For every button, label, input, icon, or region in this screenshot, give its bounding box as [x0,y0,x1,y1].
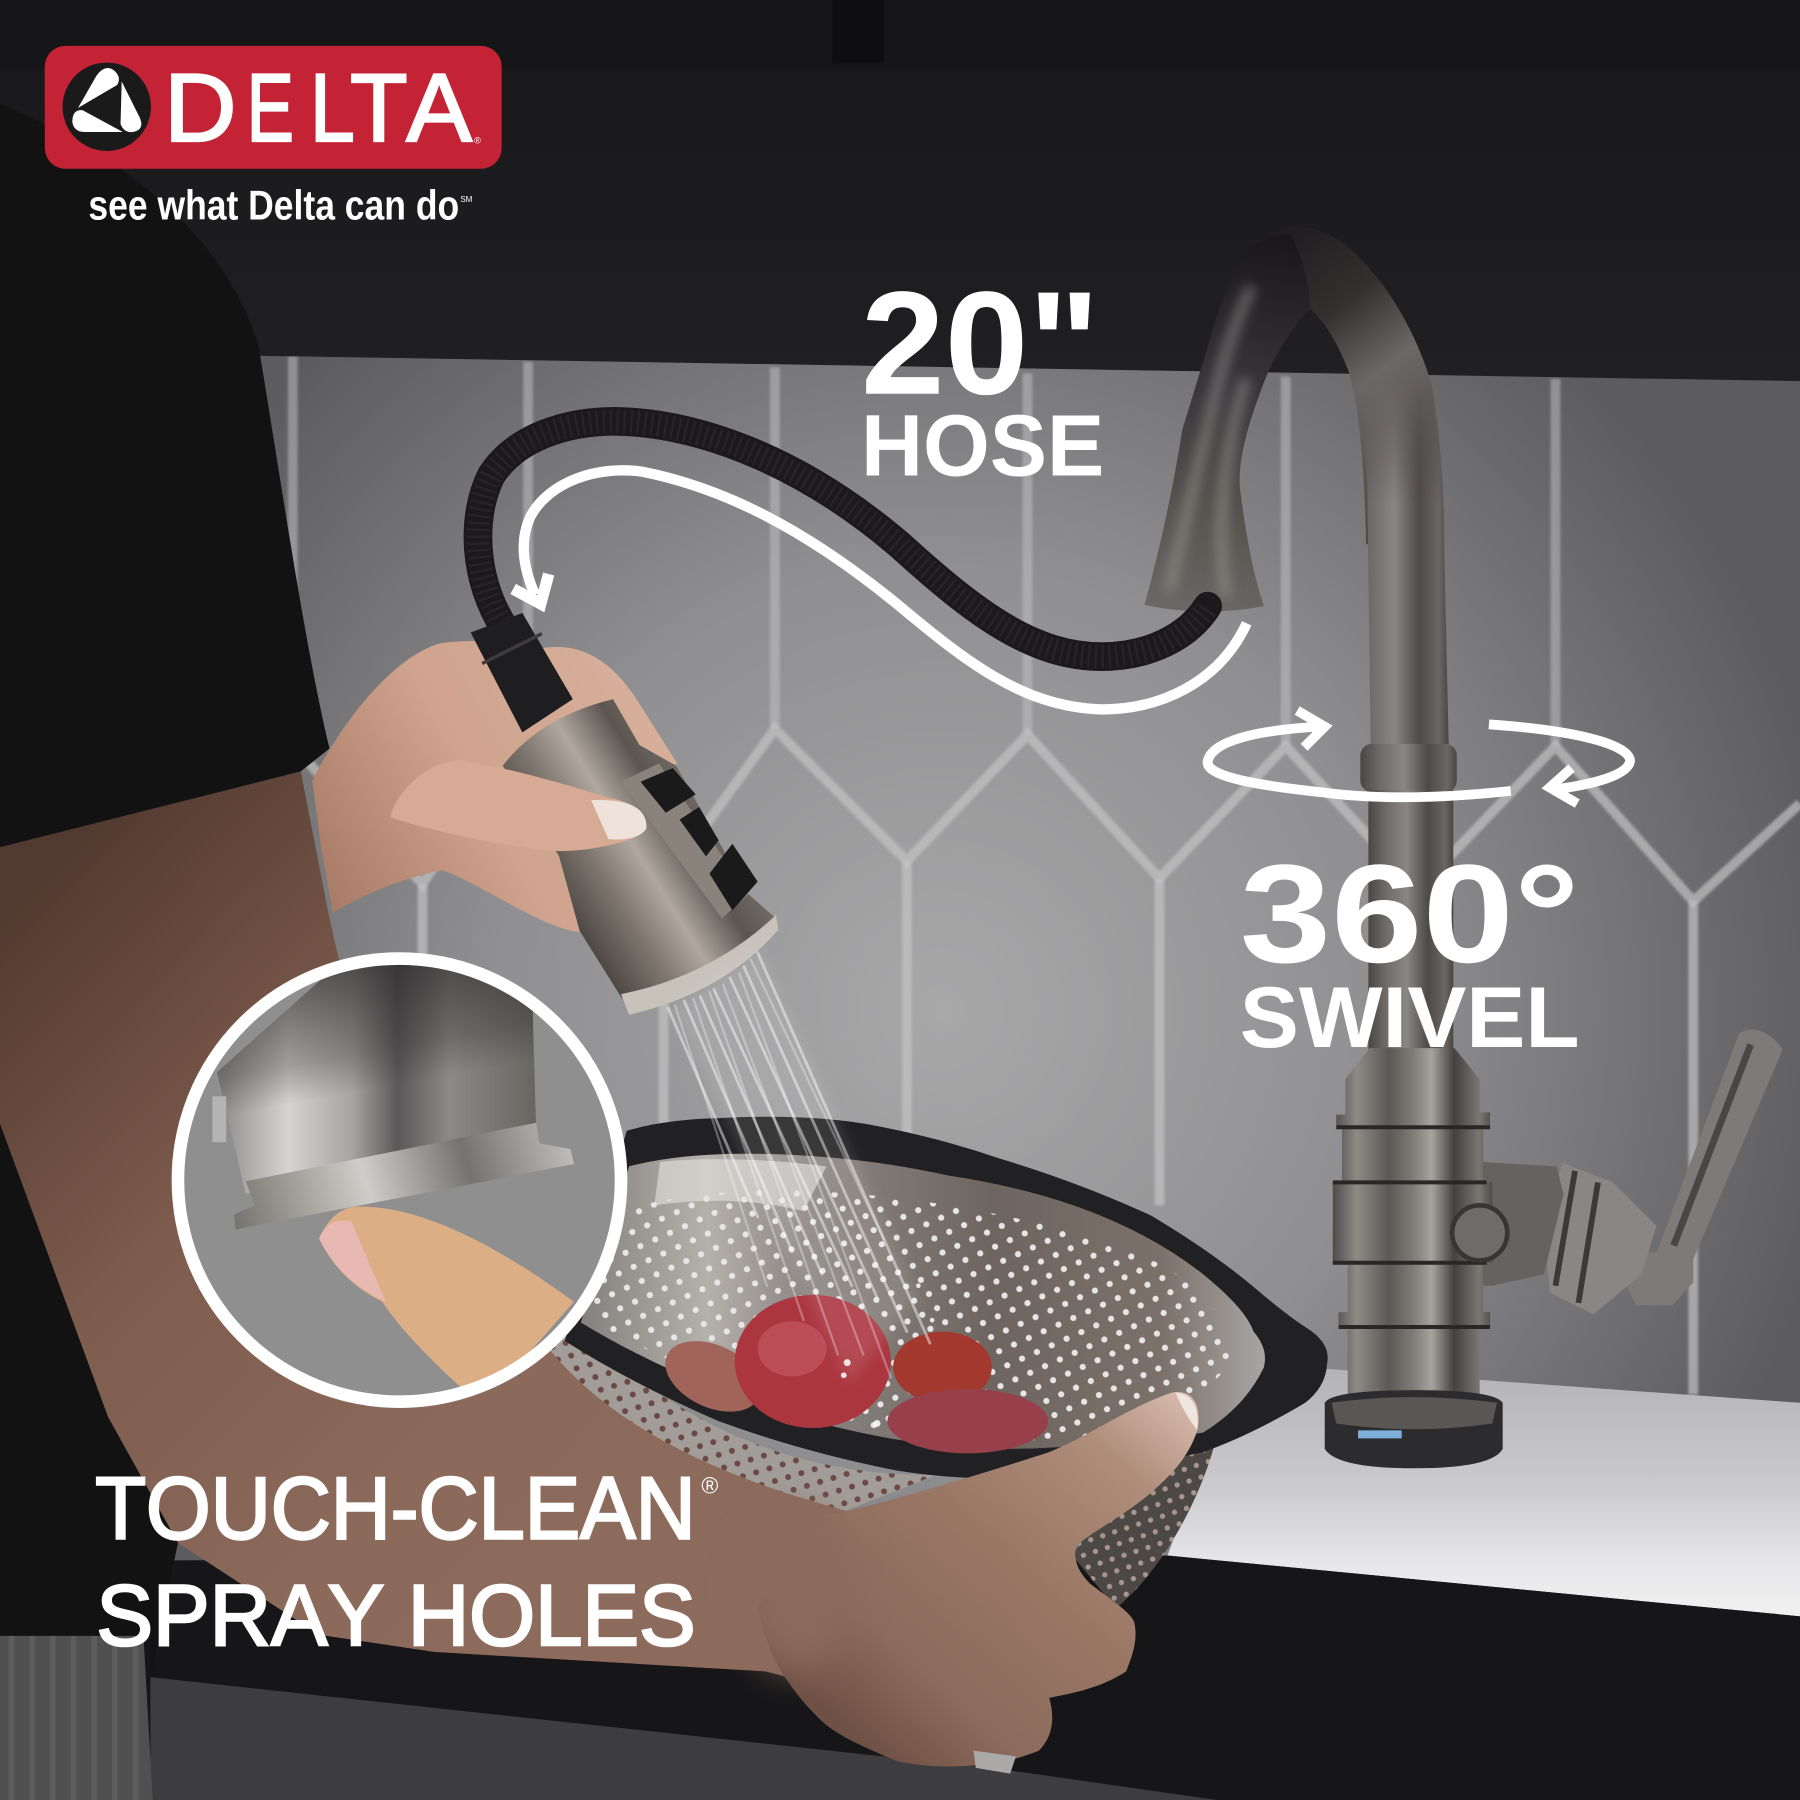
left swivel arrow [1208,727,1511,797]
logo wordmark: A [406,55,473,162]
faucet lower stem [1368,790,1453,1052]
label: 20 inch hose: 20" [861,262,1100,426]
inset ring [178,959,621,1402]
black shirt sleeve [0,103,329,847]
label: touch-clean spray holes: SPRAY HOLES [96,1568,696,1664]
label: touch-clean spray holes [95,1458,718,1664]
tile grout lines [293,356,1800,1395]
ring [973,1751,1016,1774]
arm [0,771,872,1699]
button frame [621,763,748,918]
water droplets [841,1283,934,1427]
nozzle rim [621,915,778,1015]
nozzle rim [234,1123,574,1229]
finger [319,1206,574,1406]
logo wordmark: T [350,55,408,162]
countertop [1167,1363,1800,1616]
water mist [672,948,918,1383]
base ring [1325,1390,1503,1468]
inset background [178,959,621,1402]
label: 20 inch hose: HOSE [861,397,1104,494]
hand holding colander [743,1392,1199,1774]
label: 360 degree swivel: 360° [1240,835,1580,992]
valve nut [1544,1163,1657,1314]
knit sleeve [0,1636,153,1800]
water spray [668,948,934,1427]
logo red badge [45,46,502,169]
bowl perforations [588,1190,1229,1441]
wrist blend [743,1510,853,1670]
water streaks [668,953,930,1378]
swivel collar [1360,744,1457,792]
logo wordmark: L [310,55,355,162]
hand holding spray head: palm and fingers [312,641,677,932]
logo wordmark: D [164,55,236,162]
colander rim [565,1117,1328,1478]
valve bolt [1452,1205,1507,1260]
inset callout: touch-clean spray holes [178,959,621,1406]
spray head [503,699,778,1015]
body ring shadows [1333,1127,1490,1327]
spray nozzle cup [217,959,536,1194]
bowl highlight [654,1159,827,1211]
finger nail [319,1221,386,1302]
cup upper shadow [217,964,534,1106]
lower cabinet [0,1555,1800,1800]
gooseneck spout [1247,226,1444,544]
spray head connector [471,613,573,732]
service mark: SM [460,195,473,204]
lever handle [1627,1030,1783,1305]
logo wordmark: E [247,55,294,162]
braided hose [478,421,1208,657]
side tab [212,1096,226,1142]
pull-down wand [1145,235,1310,612]
faucet body [1333,1048,1492,1402]
dark upper cabinet [0,0,1800,381]
bottom counter strip [150,1677,1217,1800]
black shirt body [0,1124,178,1677]
faucet [1145,226,1783,1468]
colander outer left [550,1320,936,1511]
hose length arrow [513,470,1247,709]
spray head body [503,699,776,999]
label: touch-clean spray holes: TOUCH-CLEAN [95,1458,696,1557]
logo wordmark [164,55,473,162]
label: 360 degree swivel: SWIVEL [1240,970,1580,1066]
label: 360 degree swivel [1240,835,1580,1066]
Delta logo [45,46,502,228]
label: touch-clean spray holes: ® [701,1472,718,1498]
indicator light [1358,1430,1402,1438]
index finger [390,760,646,851]
wand highlights [1169,287,1251,597]
right swivel arrow [1489,724,1630,790]
label: 20 inch hose [861,262,1104,494]
fingernail [591,800,646,840]
red potatoes [654,1295,1048,1453]
thumbnail [1176,1392,1198,1430]
spray buttons [641,768,758,910]
logo tagline: see what Delta can do [88,182,459,228]
cabinet groove [832,0,884,63]
faucet upper stem [1366,406,1449,744]
colander bowl [581,1154,1265,1449]
registered mark: ® [474,135,481,145]
swivel arrows [1208,711,1630,804]
colander [550,1117,1328,1608]
logo circle mark [63,63,151,151]
colander outer right [1072,1435,1213,1608]
valve arm [1435,1161,1564,1286]
